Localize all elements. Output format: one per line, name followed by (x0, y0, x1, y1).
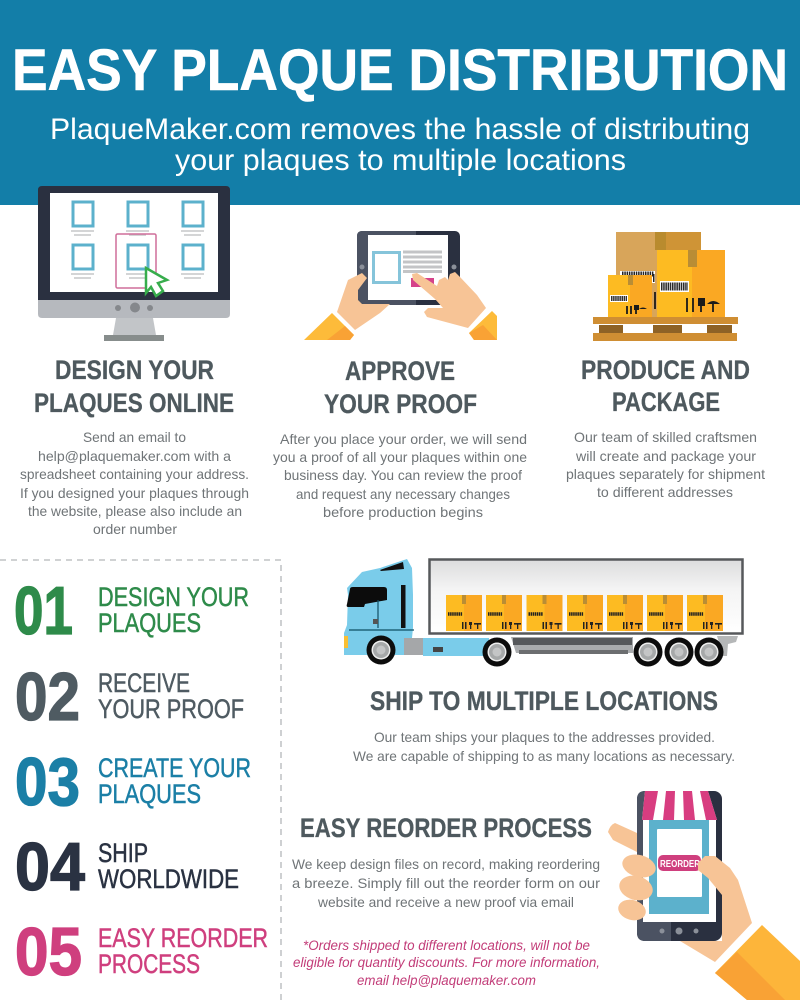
heading: produce and package (581, 355, 750, 417)
step 01: DESIGN YOUR (98, 582, 249, 612)
text: approve step body (273, 431, 527, 520)
heading: approve your proof: YOUR PROOF (324, 389, 477, 419)
heading: design your plaques online: PLAQUES ONLINE (34, 388, 234, 418)
heading: design your plaques online: DESIGN YOUR (55, 355, 214, 385)
text: design step body: help@plaquemaker.com with a (38, 448, 231, 464)
icon: phone with hand (608, 791, 800, 1000)
heading: approve your proof (324, 356, 477, 419)
icon: phone with hand: REORDER (660, 858, 700, 870)
text: reorder body (292, 856, 600, 910)
text: approve step body: business day. You can review the proof (284, 467, 522, 483)
step 04 (15, 829, 239, 905)
text: design step body: Send an email to (83, 429, 186, 445)
step 05: EASY REORDER (98, 923, 268, 953)
text: design step body (20, 429, 249, 537)
step 02 (15, 659, 244, 735)
icon: truck (344, 559, 742, 666)
text: shipping body (353, 729, 735, 764)
icon: monitor (38, 186, 230, 341)
heading: approve your proof: APPROVE (345, 356, 455, 386)
text: discount note: email help@plaquemaker.com (357, 973, 536, 988)
step 02: 02 (15, 659, 80, 735)
step 03: CREATE YOUR (98, 753, 251, 783)
text: produce step body (566, 429, 765, 500)
step 01: PLAQUES (98, 608, 201, 638)
text: produce step body: will create and package your (575, 448, 756, 464)
text: approve step body: you a proof of all your plaques within one (273, 449, 527, 465)
step 03: PLAQUES (98, 779, 201, 809)
text: approve step body: and request any necessary changes (296, 486, 510, 502)
text: shipping body: Our team ships your plaques to the addresses provided. (374, 729, 715, 745)
text: design step body: If you designed your plaques through (20, 485, 249, 501)
step 03 (15, 744, 251, 820)
heading: produce and package: PRODUCE AND (581, 355, 750, 385)
step 01: 01 (14, 573, 73, 649)
step 05: PROCESS (98, 949, 200, 979)
text: produce step body: Our team of skilled craftsmen (574, 429, 757, 445)
subtitle: your plaques to multiple locations (175, 144, 626, 177)
text: approve step body: After you place your order, we will send (280, 431, 527, 447)
text: design step body: the website, please also include an (28, 503, 242, 519)
text: produce step body: to different addresses (597, 484, 733, 500)
step 05: 05 (15, 914, 82, 990)
text: reorder body: We keep design files on record, making reordering (292, 856, 600, 872)
heading: easy reorder process: EASY REORDER PROCESS (300, 813, 592, 843)
subtitle (50, 113, 750, 177)
text: discount note: eligible for quantity discounts. For more information, (293, 955, 600, 970)
step 05 (15, 914, 268, 990)
header banner (0, 0, 800, 205)
step 04: SHIP (98, 838, 148, 868)
subtitle: PlaqueMaker.com removes the hassle of distributing (50, 113, 750, 146)
text: shipping body: We are capable of shipping to as many locations as necessary. (353, 748, 735, 764)
text: design step body: spreadsheet containing your address. (20, 466, 249, 482)
icon: boxes on pallet (593, 232, 738, 341)
text: reorder body: website and receive a new proof via email (317, 894, 574, 910)
icon: tablet with hands (304, 231, 497, 340)
text: approve step body: before production begins (323, 504, 483, 520)
text: discount note (293, 938, 600, 988)
heading: ship to multiple locations: SHIP TO MULTIPLE LOCATIONS (370, 686, 718, 716)
panel: numbered steps (0, 560, 281, 1000)
heading: design your plaques online (34, 355, 234, 418)
heading: produce and package: PACKAGE (612, 387, 720, 417)
step 02: YOUR PROOF (98, 694, 244, 724)
step 04: 04 (15, 829, 85, 905)
step 04: WORLDWIDE (98, 864, 239, 894)
text: design step body: order number (93, 521, 177, 537)
step 02: RECEIVE (98, 668, 190, 698)
text: discount note: *Orders shipped to different locations, will not be (303, 938, 590, 953)
step 01 (14, 573, 249, 649)
text: produce step body: plaques separately for shipment (566, 466, 765, 482)
text: reorder body: a breeze. Simply fill out the reorder form on our (292, 875, 600, 891)
step 03: 03 (15, 744, 80, 820)
